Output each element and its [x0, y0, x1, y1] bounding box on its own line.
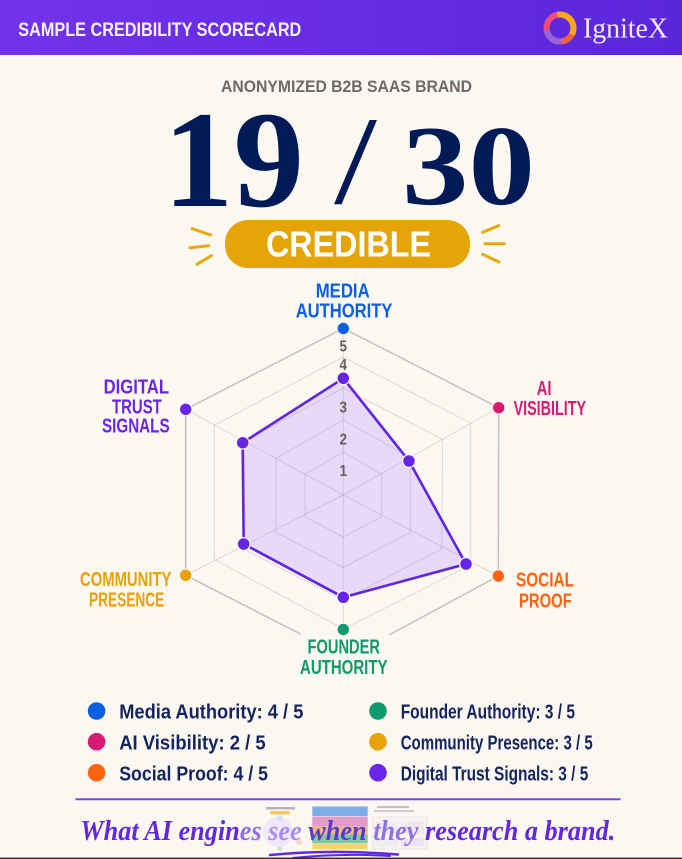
- header title: SAMPLE CREDIBILITY SCORECARD: [18, 19, 301, 41]
- score slash: /: [334, 92, 377, 231]
- data outline: [243, 378, 466, 597]
- label: founder authority: AUTHORITY: [300, 657, 388, 679]
- label: social proof: [516, 570, 574, 612]
- label: founder authority: [300, 636, 388, 679]
- badge rays: [190, 226, 504, 264]
- radar grid: [186, 329, 499, 629]
- label: community presence: [80, 569, 172, 612]
- label: media authority: AUTHORITY: [296, 301, 393, 323]
- label: community presence: COMMUNITY: [80, 569, 172, 591]
- label: ai visibility: [514, 378, 586, 420]
- data area fill: [243, 378, 466, 597]
- label: digital trust signals: [102, 377, 170, 437]
- rating badge: credible: [190, 220, 504, 268]
- legend: [88, 702, 593, 785]
- label: digital trust signals: DIGITAL: [104, 377, 169, 399]
- footer divider: [76, 798, 620, 800]
- footer thumbnail: mini report: [373, 806, 427, 849]
- data point dots: [236, 372, 472, 604]
- label: founder authority: FOUNDER: [308, 636, 380, 658]
- axis scale numbers: 1: [340, 463, 347, 480]
- legend: founder authority: [369, 702, 575, 724]
- legend: community presence: [369, 732, 593, 754]
- axis scale numbers: 4: [340, 357, 347, 374]
- legend: community presence: Community Presence: 3 / 5: [401, 732, 593, 754]
- logo: IgniteX: [542, 10, 668, 46]
- footer thumbnail: colour stripes: [312, 806, 368, 849]
- score maximum: 30: [402, 102, 535, 229]
- logo wordmark: IgniteX: [583, 14, 668, 45]
- legend: ai visibility: AI Visibility: 2 / 5: [119, 732, 266, 754]
- legend: media authority: Media Authority: 4 / 5: [119, 702, 303, 724]
- legend: founder authority: Founder Authority: 3 / 5: [401, 702, 575, 724]
- axis endpoint dots: [180, 322, 505, 636]
- axis scale numbers: 5: [340, 339, 347, 356]
- icon: ring logo: [542, 10, 578, 46]
- score value: 19: [163, 83, 304, 236]
- label: community presence: PRESENCE: [89, 590, 164, 612]
- legend: digital trust signals: [369, 763, 588, 785]
- label: digital trust signals: TRUST: [112, 396, 162, 418]
- tagline: What AI engines see when they research a brand.: [80, 815, 615, 847]
- axis scale numbers: [340, 339, 347, 480]
- legend: social proof: Social Proof: 4 / 5: [119, 763, 268, 785]
- radar chart: [80, 280, 586, 679]
- label: ai visibility: VISIBILITY: [514, 398, 586, 420]
- badge label: CREDIBLE: [266, 224, 431, 265]
- label: media authority: [296, 280, 393, 323]
- axis scale numbers: 3: [340, 400, 347, 417]
- hand-drawn underline: [270, 852, 398, 858]
- subtitle: ANONYMIZED B2B SAAS BRAND: [221, 78, 472, 96]
- bottom edge line: [0, 858, 682, 859]
- axis scale numbers: 2: [340, 432, 347, 449]
- label: digital trust signals: SIGNALS: [102, 415, 170, 437]
- outer hexagon: [186, 328, 499, 635]
- footer thumbnail: mini scorecard: [255, 807, 302, 852]
- legend: digital trust signals: Digital Trust Signals: 3 / 5: [401, 763, 588, 785]
- label: ai visibility: AI: [537, 378, 551, 400]
- label: media authority: MEDIA: [316, 280, 370, 302]
- header band: [0, 0, 682, 55]
- score: 19 / 30: [163, 83, 535, 236]
- label: social proof: PROOF: [519, 590, 572, 612]
- label: social proof: SOCIAL: [516, 570, 574, 592]
